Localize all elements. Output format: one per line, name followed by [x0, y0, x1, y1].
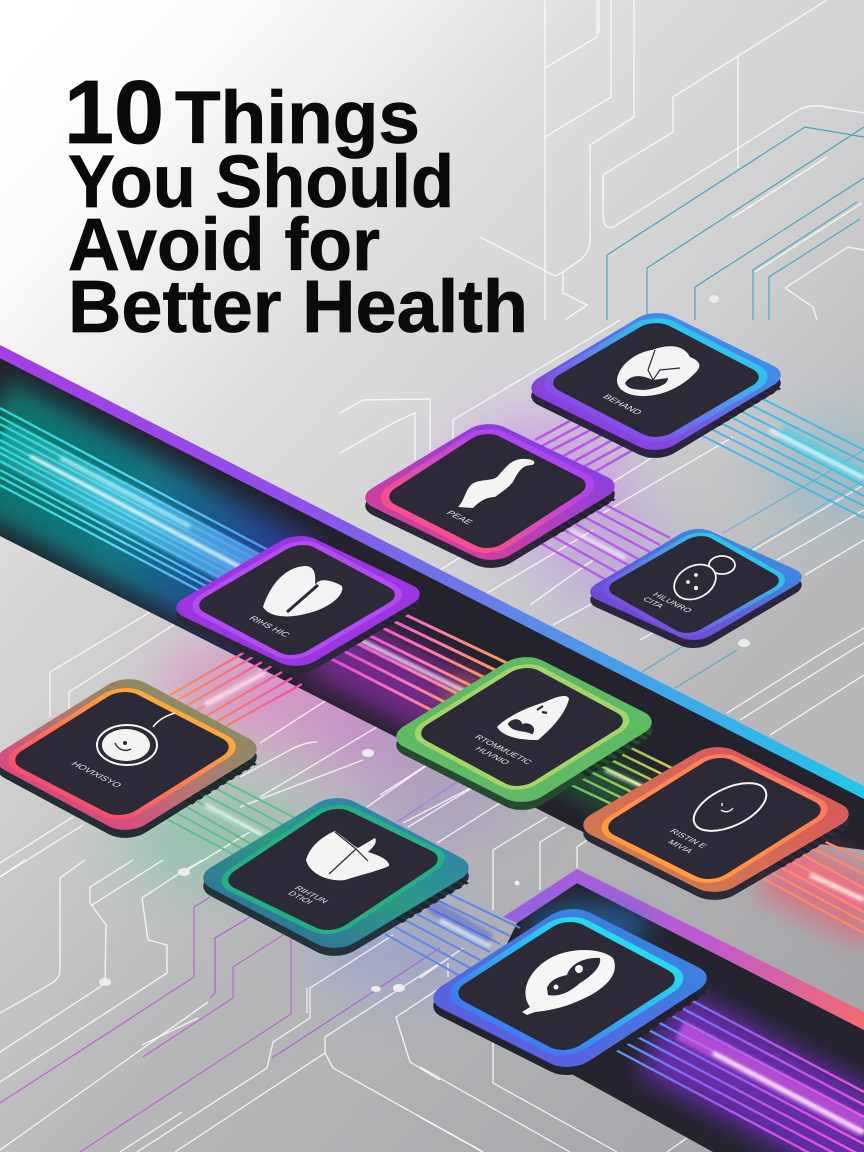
title: Things — [175, 76, 420, 159]
label: BEHAND — [601, 393, 645, 416]
icon: lungs — [263, 566, 342, 616]
icon: organ with spots — [522, 950, 615, 1015]
icon: ring — [97, 713, 175, 765]
icon: head outline — [668, 556, 735, 606]
card: bottom, organ icon — [422, 903, 718, 1081]
icon: bone — [458, 459, 534, 508]
light bundle: card 6 to card 7 — [565, 745, 680, 808]
card: right, head icon — [582, 525, 810, 652]
light bundle: card 5 to card 8 — [165, 782, 295, 858]
label: CITA — [641, 596, 667, 610]
circuit nodes — [99, 295, 750, 992]
label: RIHS HIC — [247, 615, 293, 638]
title: Avoid for — [68, 203, 380, 286]
light bundle: card 2 to card 3 — [535, 498, 670, 582]
light bundle: teal band streams — [0, 408, 300, 644]
main diagonal band — [0, 345, 864, 850]
title — [64, 63, 528, 348]
label: MIVIA — [665, 839, 696, 855]
light bundle: card 9 to lower right — [612, 998, 864, 1152]
icon: nose — [497, 696, 569, 740]
title: Better Health — [68, 265, 528, 348]
card: lower left, tooth icon — [192, 792, 480, 962]
icon: oval — [687, 773, 773, 841]
label: RIHTUN — [292, 884, 331, 905]
card: centre left, lungs icon — [166, 531, 430, 679]
lower band — [470, 869, 864, 1152]
label: RTOMMUETIC — [472, 733, 535, 765]
icon: tongue — [306, 831, 389, 880]
title: 10 — [64, 63, 164, 163]
title: You Should — [68, 140, 454, 223]
label: RISTIN E — [667, 828, 710, 850]
label: HOVIXISYO — [69, 760, 124, 789]
light bundle: violet to orange, centre band — [296, 614, 508, 736]
card: right lower, oval icon — [572, 741, 860, 906]
card: upper middle, bone icon — [355, 419, 625, 573]
label: HILUNRO — [650, 591, 695, 614]
light bundle: card 8 to card 9 — [385, 892, 520, 976]
label: HUVNIO — [473, 745, 512, 766]
light bundle: card 2 to card 1 — [535, 410, 650, 478]
card: left, ring icon — [0, 673, 267, 844]
card: centre, nose icon — [386, 651, 662, 816]
icon: organ — [617, 346, 699, 396]
card: top right, digestive icon — [521, 308, 791, 463]
light bundle: card 5 to card 4 — [170, 652, 302, 726]
label: PEAE — [444, 509, 475, 526]
light bundle: card 7 to right edge — [757, 838, 864, 933]
light bundle: card 1 to right edge — [695, 395, 864, 518]
label: DTIOI — [286, 890, 315, 905]
